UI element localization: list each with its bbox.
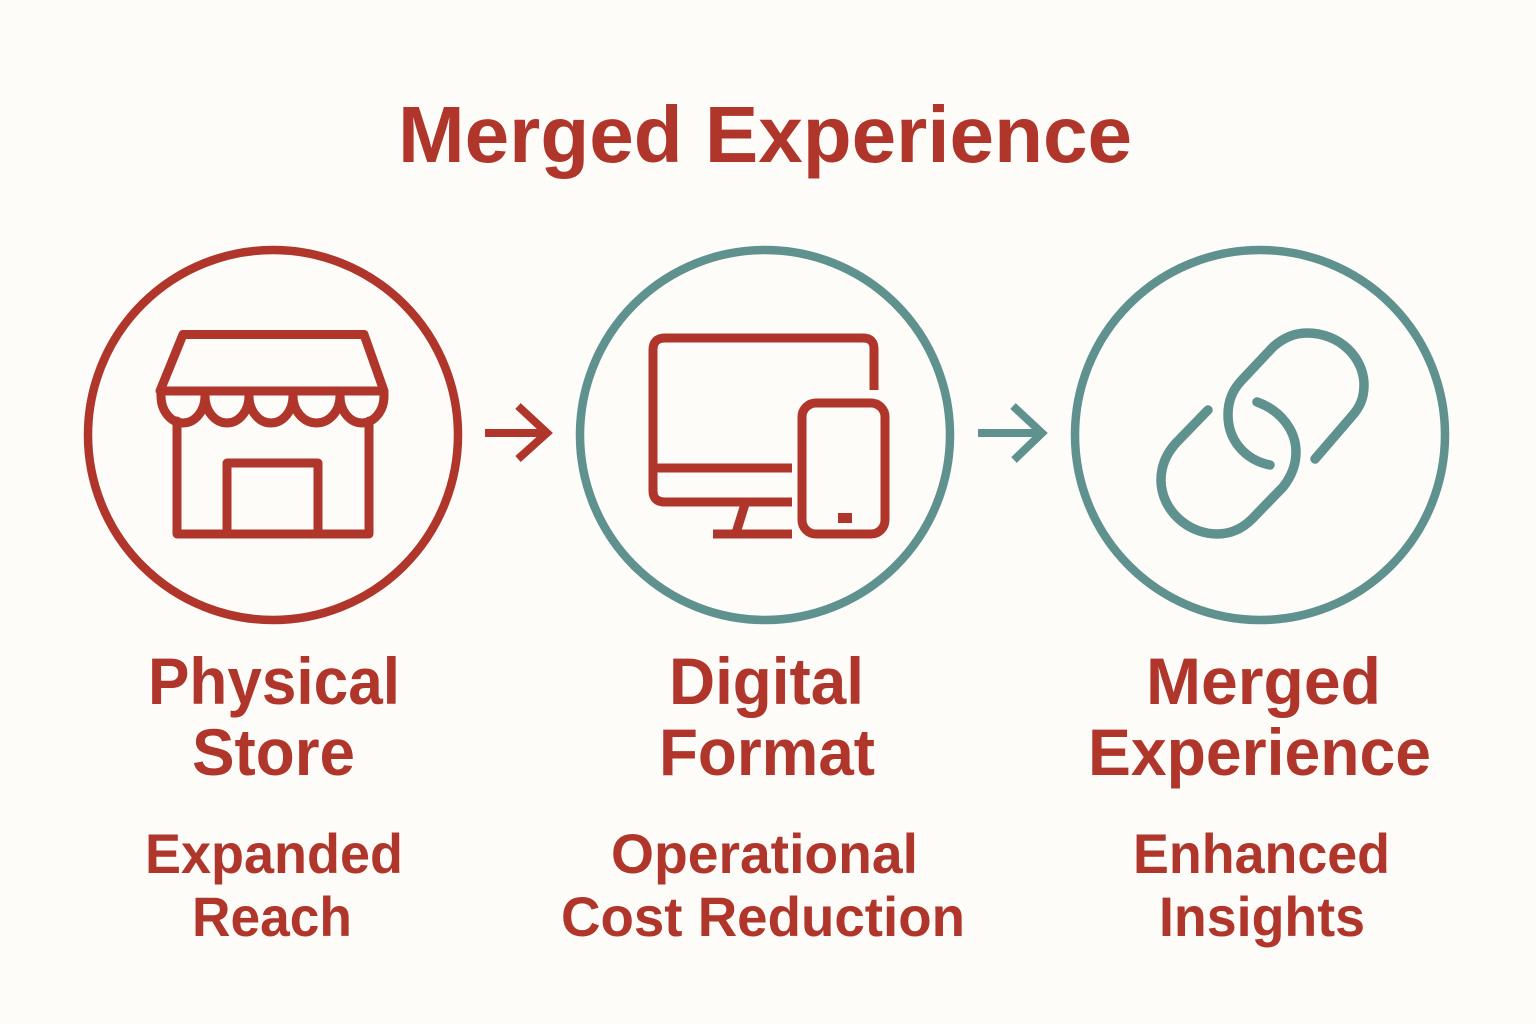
icon: chain link [1161, 333, 1364, 534]
label: digital format: Format [659, 715, 875, 789]
circle: merged experience [1075, 250, 1445, 620]
benefit: expanded reach: Reach [192, 885, 352, 948]
icon: monitor and tablet [653, 338, 885, 534]
label: physical store: Physical [148, 644, 400, 718]
label: digital format: Digital [669, 644, 864, 718]
arrow: digital to merged [978, 406, 1042, 460]
benefit: operational cost reduction: Cost Reduction [561, 885, 965, 948]
circle: physical store [88, 250, 458, 620]
benefit: expanded reach [145, 822, 403, 948]
arrow: physical to digital [485, 406, 548, 459]
panel: digital format [561, 250, 965, 948]
benefit: operational cost reduction [561, 822, 965, 948]
label: physical store [148, 644, 400, 789]
benefit: enhanced insights: Enhanced [1133, 822, 1390, 885]
benefit: enhanced insights [1133, 822, 1390, 948]
benefit: enhanced insights: Insights [1159, 885, 1365, 948]
panel: merged experience [1075, 250, 1445, 948]
label: merged experience: Merged [1146, 644, 1381, 718]
panel: physical store [88, 250, 458, 948]
title: Merged Experience [398, 90, 1132, 179]
label: digital format [659, 644, 875, 789]
benefit: expanded reach: Expanded [145, 822, 403, 885]
benefit: operational cost reduction: Operational [611, 822, 918, 885]
circle: digital format [580, 250, 950, 620]
label: merged experience [1088, 644, 1431, 789]
label: physical store: Store [192, 715, 355, 789]
icon: storefront [160, 334, 384, 534]
label: merged experience: Experience [1088, 715, 1431, 789]
